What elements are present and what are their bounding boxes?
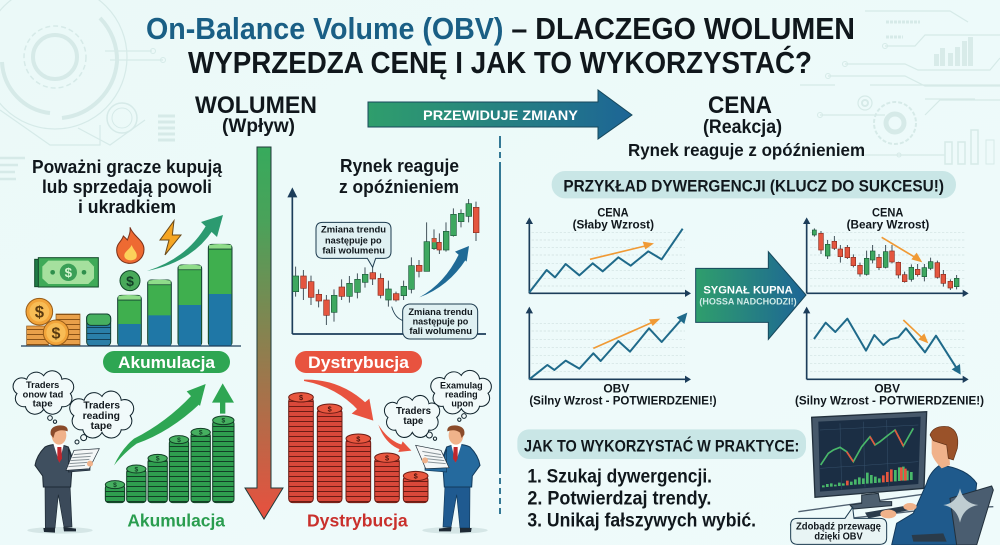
bar: stack 3	[148, 280, 171, 346]
title	[146, 11, 855, 80]
bar: stack 2	[118, 295, 141, 346]
chart: red coin stacks	[289, 393, 428, 503]
bubble: traders right inner	[384, 395, 440, 440]
chart: OBV strong growth	[526, 307, 717, 407]
bubble: traders right inner: tape	[403, 416, 424, 427]
callout: trend change bottom	[392, 304, 478, 339]
chart: price falling candles	[803, 206, 969, 297]
callout: trend change bottom: fali wolumenu	[409, 326, 472, 336]
heading: cena: (Reakcja)	[703, 117, 782, 138]
bar: stack 1	[87, 314, 111, 346]
chart: price falling candles: (Beary Wzrost)	[847, 217, 929, 231]
chart: OBV strong growth: (Silny Wzrost - POTWIERDZENIE!)	[529, 393, 717, 407]
text: market reacts: Rynek reaguje	[340, 156, 459, 176]
heading: cena: Rynek reaguje z opóźnieniem	[628, 140, 865, 160]
chart: green coin stacks: $	[199, 430, 203, 437]
callout: gain advantage: dzięki OBV	[814, 531, 863, 542]
bubble: traders left outer: onow tad	[23, 389, 63, 399]
arrow: red falling	[304, 380, 373, 421]
list: steps: 3. Unikaj fałszywych wybić.	[527, 511, 756, 532]
heading pill: divergence: PRZYKŁAD DYWERGENCJI (KLUCZ DO SUKCESU!)	[563, 177, 944, 196]
bar: stack 4	[178, 265, 202, 346]
callout: trend change top: następuje po	[325, 235, 382, 245]
title: WYPRZEDZA CENĘ I JAK TO WYKORZYSTAĆ?	[188, 44, 812, 80]
chart: price falling candles: CENA	[872, 206, 904, 220]
heading pill: divergence	[552, 171, 956, 198]
arrow: green up	[212, 383, 234, 414]
chart: green coin stacks	[105, 416, 234, 503]
panel: bottom left and centre (stacks, traders)	[13, 370, 491, 534]
chart: green coin stacks: $	[221, 418, 225, 425]
arrow: buy signal	[696, 252, 806, 339]
icon: desk	[790, 493, 993, 525]
bubble: traders left inner: reading	[83, 411, 120, 422]
icon: gold coins	[26, 298, 80, 346]
panel: accumulation bars and money	[21, 221, 241, 346]
list: steps: 1. Szukaj dywergencji.	[527, 466, 712, 487]
label: dystrybucja: Dystrybucja	[307, 510, 408, 530]
text: serious players: i ukradkiem	[78, 197, 176, 217]
watermark star	[943, 488, 978, 523]
bubble: traders left outer	[13, 371, 74, 423]
icon: banknote	[35, 258, 98, 287]
figure: trader at desk	[865, 426, 993, 545]
bubble: traders right inner: Traders	[396, 406, 431, 417]
arrow: przewiduje zmiany: PRZEWIDUJE ZMIANY	[423, 107, 579, 123]
label pill: dystrybucja	[295, 351, 422, 373]
chart: OBV strong growth: OBV	[603, 382, 629, 396]
heading: cena: CENA	[708, 92, 772, 119]
icon: small green coin: $	[126, 273, 134, 289]
chart: candlesticks	[287, 187, 486, 339]
bubble: traders right outer: Examulag	[440, 380, 483, 390]
decorative circuit pattern: top left	[0, 0, 175, 179]
icon: flame	[117, 227, 144, 263]
icon: banknote: $	[65, 265, 73, 280]
chart: green coin stacks: $	[134, 466, 138, 473]
chart: red coin stacks: $	[356, 434, 360, 443]
callout: trend change top: fali wolumenu	[322, 245, 385, 255]
panel: divergence example	[526, 171, 984, 407]
figure: trader right	[416, 425, 488, 534]
arrow: green rising curve	[114, 384, 206, 465]
label pill: akumulacja	[103, 351, 230, 373]
icon: lightning	[160, 221, 181, 255]
title: On-Balance Volume (OBV) – DLACZEGO WOLUMEN	[146, 11, 855, 46]
chart: red coin stacks: $	[299, 393, 303, 402]
panel: practical use	[517, 412, 993, 545]
callout: trend change bottom: Zmiana trendu	[408, 307, 473, 317]
chart: green coin stacks: $	[113, 482, 117, 489]
heading: wolumen: WOLUMEN	[195, 92, 317, 119]
list: steps: 2. Potwierdzaj trendy.	[527, 488, 711, 509]
bubble: traders left outer: Traders	[26, 380, 59, 390]
heading: cena	[628, 92, 865, 160]
bubble: traders right outer: upon	[451, 398, 473, 408]
bubble: traders left inner	[70, 391, 134, 444]
bubble: traders right outer: reading	[445, 389, 478, 399]
arrow: buy signal: SYGNAŁ KUPNA	[703, 284, 793, 296]
arrow: green growth	[147, 215, 223, 271]
heading pill: practice: JAK TO WYKORZYSTAĆ W PRAKTYCE:	[524, 437, 799, 456]
chart: green coin stacks: $	[156, 456, 160, 463]
arrow: buy signal: (HOSSA NADCHODZI!)	[699, 296, 797, 306]
icon: gold coins: $	[35, 303, 45, 322]
text: serious players: Poważni gracze kupują	[32, 157, 223, 177]
callout: trend change top	[316, 222, 391, 267]
decorative circuit pattern: top right	[800, 11, 1000, 164]
heading: wolumen	[195, 92, 317, 137]
divider	[499, 136, 501, 514]
chart: red coin stacks: $	[385, 453, 389, 462]
bubble: traders left inner: tape	[91, 421, 112, 432]
bar: stack 5	[208, 244, 232, 346]
arrow: vertical volume gradient	[245, 147, 283, 519]
text: market reacts	[339, 156, 459, 197]
bubble: traders left inner: Traders	[83, 401, 120, 412]
chart: green coin stacks: $	[177, 437, 181, 444]
icon: gold coins: $	[52, 325, 61, 342]
list: steps	[527, 466, 756, 532]
text: market reacts: z opóźnieniem	[339, 177, 459, 197]
chart: OBV falling line	[795, 307, 984, 407]
label pill: dystrybucja: Dystrybucja	[308, 353, 410, 372]
icon: monitor with chart	[812, 412, 927, 509]
callout: trend change bottom: następuje po	[413, 316, 469, 326]
bubble: traders right outer	[431, 370, 491, 421]
callout: gain advantage	[791, 507, 887, 544]
text: serious players: lub sprzedają powoli	[42, 177, 212, 197]
chart: price weak growth: (Słaby Wzrost)	[573, 217, 654, 231]
callout: gain advantage: Zdobądź przewagę	[796, 521, 881, 532]
chart: red coin stacks: $	[328, 404, 332, 413]
callout: trend change top: Zmiana trendu	[321, 225, 386, 235]
label pill: akumulacja: Akumulacja	[118, 353, 216, 372]
arrow: blue trend	[419, 246, 469, 297]
figure: trader left	[27, 425, 99, 534]
bubble: traders left outer: tape	[33, 398, 53, 408]
chart: price weak growth	[526, 206, 691, 297]
chart: OBV falling line: OBV	[874, 381, 900, 395]
heading pill: practice	[517, 429, 806, 459]
chart: red coin stacks: $	[414, 472, 418, 481]
chart: OBV falling line: (Silny Wzrost - POTWIERDZENIE!)	[795, 393, 984, 407]
chart: price weak growth: CENA	[597, 206, 629, 220]
label: akumulacja: Akumulacja	[127, 510, 225, 530]
baseline	[21, 344, 241, 348]
arrow: przewiduje zmiany	[368, 90, 632, 139]
arrow: red falling small	[378, 425, 411, 452]
heading: wolumen: (Wpływ)	[222, 116, 295, 137]
icon: small green coin	[120, 271, 140, 291]
text: serious players	[32, 157, 223, 217]
